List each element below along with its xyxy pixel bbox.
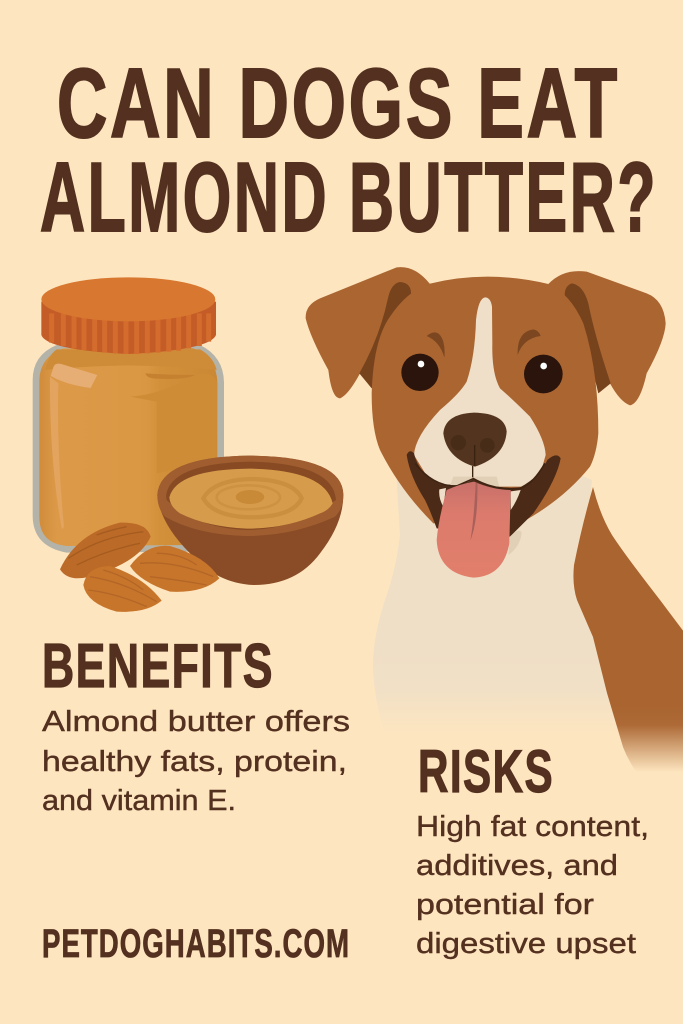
dog chest [373,440,660,735]
eyebrows [427,329,541,358]
text: risks description: High fat content, [416,811,649,843]
right eye [524,355,563,393]
illustration: dog [306,267,683,775]
heading: benefits: BENEFITS [42,632,274,701]
tongue [437,482,511,578]
white blaze and muzzle [414,297,546,487]
heading: risks: RISKS [418,738,554,805]
dog shoulder [573,487,683,775]
mouth [407,451,561,555]
right ear [548,271,666,405]
left ear [306,267,430,398]
head [372,277,598,523]
jar [33,345,224,553]
text: benefits description: healthy fats, protein, [42,746,347,778]
text: risks description: additives, and [416,850,618,882]
left eye [401,354,439,391]
text: risks description: potential for [416,889,594,921]
nose [443,413,507,477]
almond butter surface [169,469,333,529]
text: risks description [416,811,649,960]
almonds [60,523,219,612]
bowl [157,456,343,585]
jar lid [41,277,216,354]
text: benefits description: Almond butter offers [42,706,350,738]
illustration: almond butter jar, bowl and almonds [33,277,343,612]
text: risks description: digestive upset [416,928,636,960]
text: benefits description [42,706,350,817]
title [40,48,658,252]
website: PETDOGHABITS.COM [42,922,350,966]
text: benefits description: and vitamin E. [42,785,236,817]
